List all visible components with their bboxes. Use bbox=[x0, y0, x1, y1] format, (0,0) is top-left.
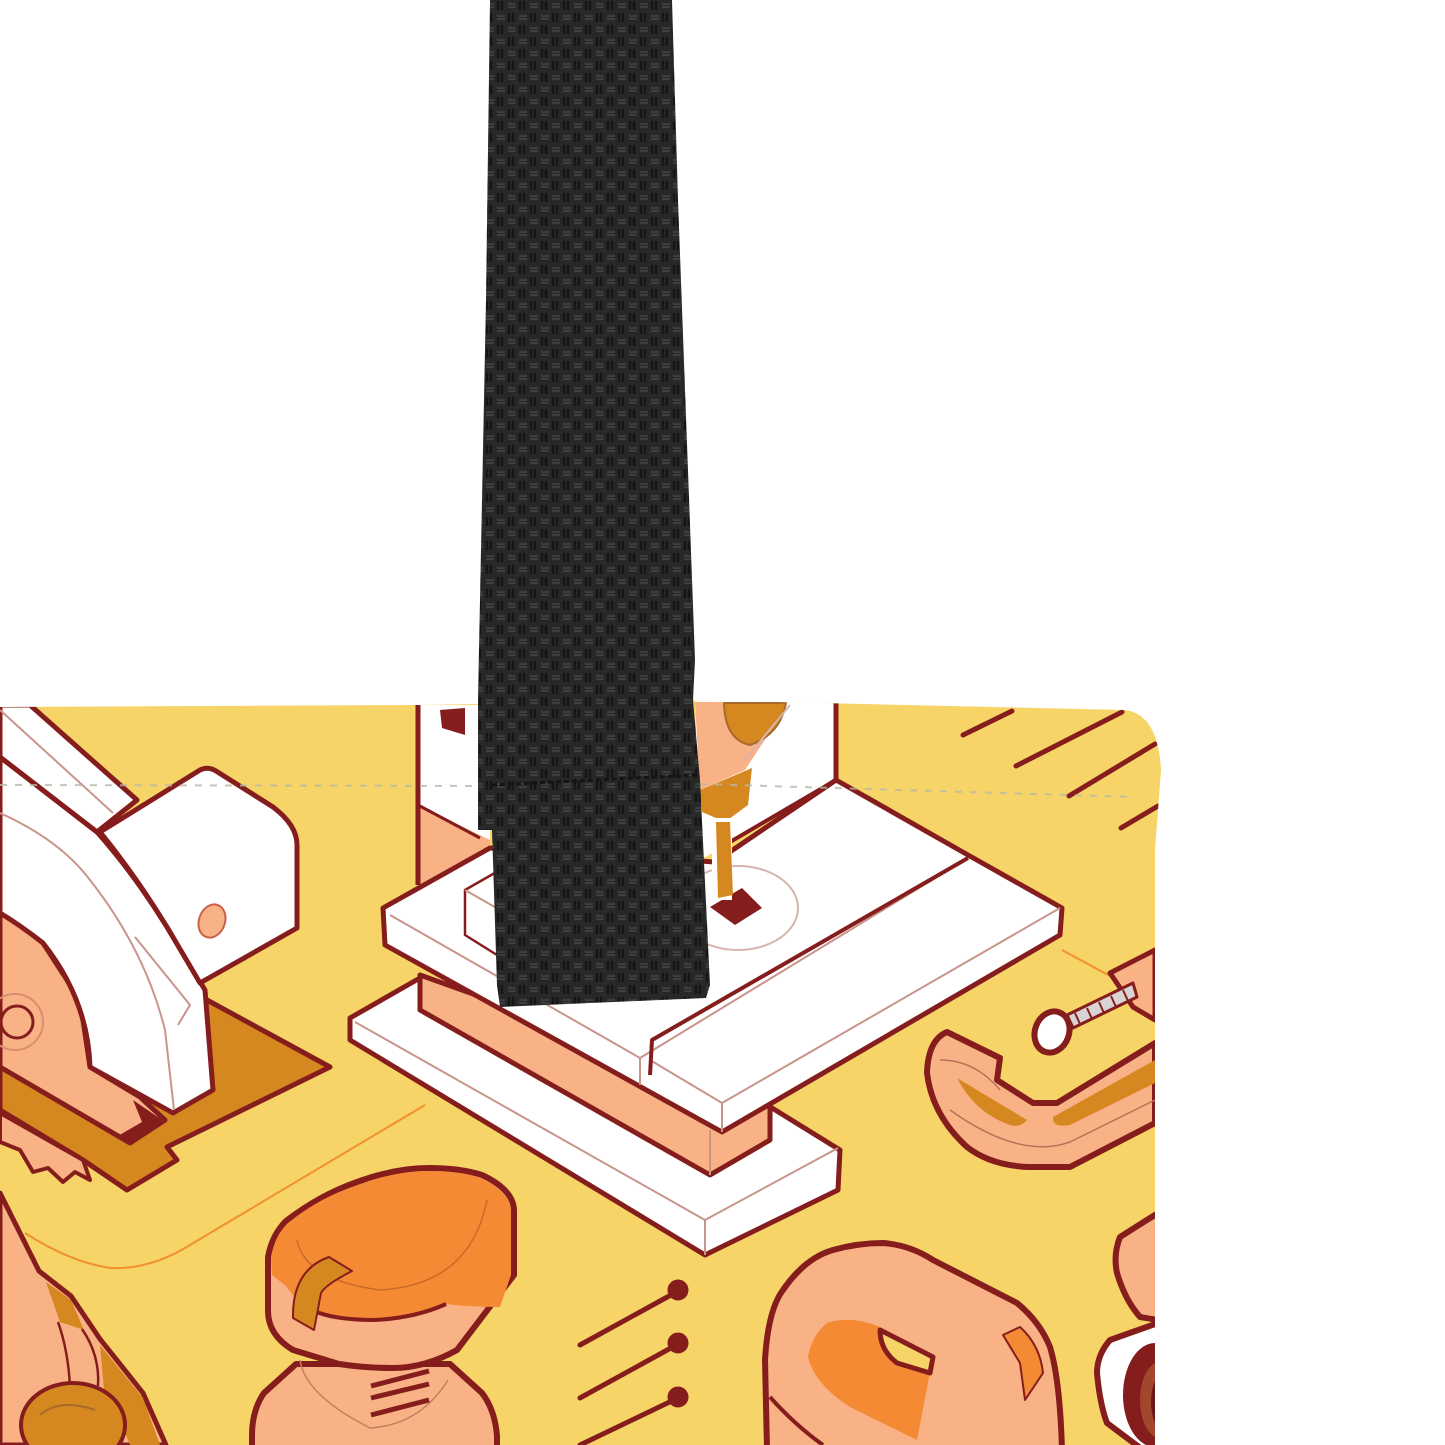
icon: clamp bbox=[927, 950, 1155, 1167]
chuck and bit bbox=[695, 702, 768, 790]
upper right column bbox=[695, 700, 836, 860]
table bbox=[383, 780, 1062, 1132]
icon: nails bbox=[580, 1282, 686, 1445]
strap: black woven handle bbox=[478, 0, 710, 1007]
base plate bbox=[350, 978, 840, 1255]
icon: wood handle bbox=[0, 1193, 166, 1445]
peach support bbox=[420, 975, 770, 1175]
icon: circular saw bbox=[0, 705, 330, 1190]
icon: bolt knob bbox=[252, 1168, 514, 1445]
strap fold line bbox=[492, 775, 698, 785]
icon: hand sander bbox=[765, 1243, 1062, 1445]
speed lines top right bbox=[963, 711, 1158, 828]
bag body bbox=[0, 695, 1187, 1445]
icon: hose coupling bbox=[1094, 1211, 1155, 1445]
icon: orange guide lines bbox=[25, 1105, 425, 1268]
stitching line bbox=[0, 784, 1135, 797]
column bbox=[420, 705, 490, 840]
icon: drill press bbox=[350, 700, 1062, 1255]
